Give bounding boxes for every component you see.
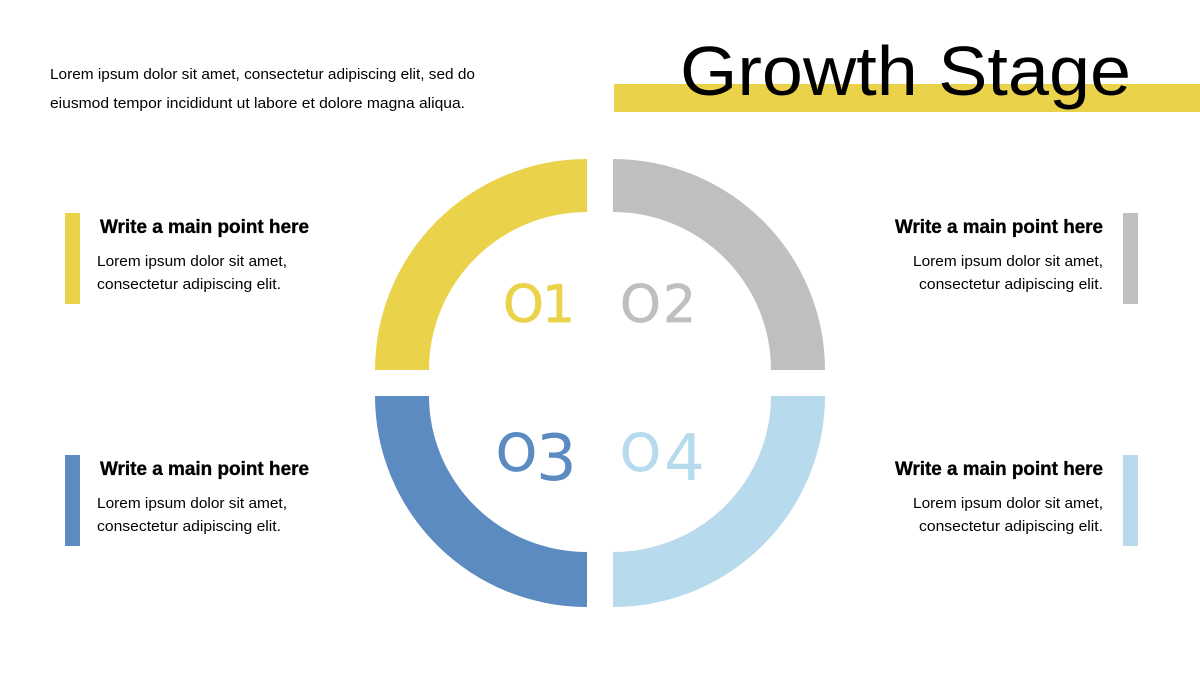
- point 3: [65, 455, 309, 546]
- accent bar: [1123, 213, 1138, 304]
- segment 01 yellow: [375, 159, 587, 370]
- body: Lorem ipsum dolor sit amet,: [97, 496, 287, 512]
- intro text: Lorem ipsum dolor sit amet, consectetur adipiscing elit, sed do: [50, 67, 475, 83]
- accent bar: [65, 455, 80, 546]
- body: Lorem ipsum dolor sit amet,: [913, 254, 1103, 270]
- title: Growth Stage: [680, 32, 1131, 110]
- number 04: 4: [664, 422, 705, 496]
- point 2: consectetur adipiscing elit.: [919, 277, 1103, 293]
- segment 04 light blue: [613, 396, 825, 607]
- body: Lorem ipsum dolor sit amet,: [97, 254, 287, 270]
- body: Lorem ipsum dolor sit amet,: [913, 496, 1103, 512]
- segment 03 blue: [375, 396, 587, 607]
- number 03: O: [496, 424, 537, 484]
- accent bar: [1123, 455, 1138, 546]
- ring chart: [375, 159, 825, 607]
- heading: Write a main point here: [100, 217, 309, 238]
- number 02: O2: [620, 275, 696, 335]
- number 01: O1: [503, 275, 575, 335]
- number 04: [620, 422, 705, 496]
- point 4: [895, 455, 1138, 546]
- number 04: O: [620, 424, 661, 484]
- number 03: [496, 422, 577, 496]
- heading: Write a main point here: [100, 459, 309, 480]
- segment 02 gray: [613, 159, 825, 370]
- title banner: [614, 32, 1200, 112]
- number 03: 3: [536, 422, 577, 496]
- point 1: [65, 213, 309, 304]
- accent bar: [65, 213, 80, 304]
- point 3: consectetur adipiscing elit.: [97, 519, 281, 535]
- intro text: eiusmod tempor incididunt ut labore et dolore magna aliqua.: [50, 96, 465, 112]
- point 2: [895, 213, 1138, 304]
- intro text: [50, 67, 475, 112]
- point 1: consectetur adipiscing elit.: [97, 277, 281, 293]
- heading: Write a main point here: [895, 217, 1103, 238]
- heading: Write a main point here: [895, 459, 1103, 480]
- point 4: consectetur adipiscing elit.: [919, 519, 1103, 535]
